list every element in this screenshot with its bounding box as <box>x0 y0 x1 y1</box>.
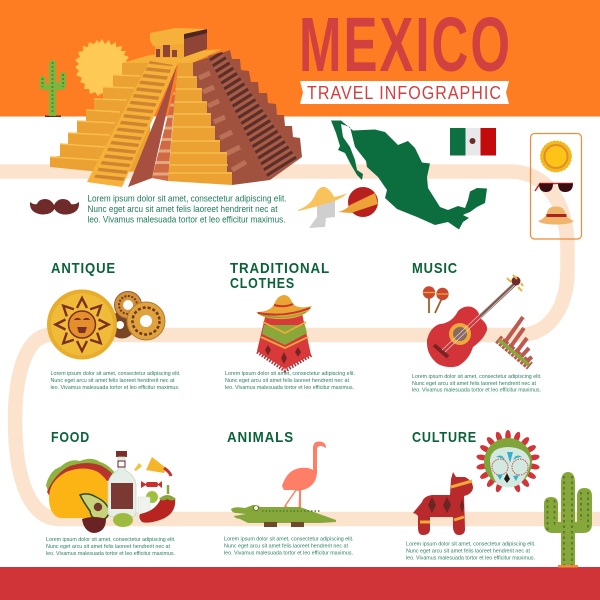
text: antique description: leo. Vivamus malesuada tortor et leo efficitur maximus. <box>50 385 180 391</box>
temple side lintel <box>184 29 207 39</box>
text: food description: leo. Vivamus malesuada tortor et leo efficitur maximus. <box>46 551 175 557</box>
temple doors <box>156 45 177 57</box>
icon: head with hat <box>298 187 348 228</box>
illustration: sugar skull <box>476 430 540 493</box>
pyramid centre step edges <box>162 77 232 173</box>
poncho fringe <box>257 352 312 371</box>
temple front wall <box>155 43 184 58</box>
text: animals description <box>224 536 354 556</box>
text: music description: Nunc eget arcu sit amet felis laoreet hendrerit nec at <box>412 381 536 387</box>
pyramid platform <box>122 49 222 63</box>
illustration: Mayan pyramid <box>50 28 302 187</box>
text: animals description: Lorem ipsum dolor sit amet, consectetur adipiscing elit. <box>224 536 354 542</box>
shot glass <box>138 491 158 522</box>
text: clothes description <box>225 371 355 391</box>
text: clothes description: Lorem ipsum dolor sit amet, consectetur adipiscing elit. <box>225 371 355 377</box>
text: music description <box>412 374 542 394</box>
heading: antique: ANTIQUE <box>51 260 116 277</box>
heading: traditional clothes: CLOTHES <box>230 275 295 292</box>
icon: small cactus <box>40 60 66 117</box>
temple roof <box>150 28 207 46</box>
lime <box>113 513 133 527</box>
text: food description: Lorem ipsum dolor sit amet, consectetur adipiscing elit. <box>46 537 176 543</box>
heading: animals: ANIMALS <box>227 429 294 446</box>
poncho body <box>257 313 311 369</box>
footer: red band <box>0 567 600 600</box>
map of Mexico <box>331 120 487 230</box>
illustration: poncho and sombrero <box>256 295 312 371</box>
text: food description: Nunc eget arcu sit amet felis laoreet hendrerit nec at <box>46 544 170 550</box>
poncho green band <box>262 325 307 345</box>
pyramid brick stripe <box>152 65 177 181</box>
text: antique description: Nunc eget arcu sit amet felis laoreet hendrerit nec at <box>50 378 175 384</box>
heading: food: FOOD <box>51 429 90 446</box>
chili <box>139 485 176 523</box>
text: animals description: leo. Vivamus malesuada tortor et leo efficitur maximus. <box>224 550 353 556</box>
pyramid centre steps <box>168 63 232 185</box>
poncho diamonds <box>265 345 301 364</box>
icon: striped ball <box>338 187 378 217</box>
beads <box>108 292 165 340</box>
main text block: leo. Vivamus malesuada tortor et leo efficitur maximus. <box>88 214 286 224</box>
text: culture description: Lorem ipsum dolor sit amet, consectetur adipiscing elit. <box>406 542 536 548</box>
small spice <box>134 463 142 471</box>
text: antique description: Lorem ipsum dolor sit amet, consectetur adipiscing elit. <box>50 371 180 377</box>
text: culture description: Nunc eget arcu sit amet felis laoreet hendrerit nec at <box>406 548 530 554</box>
icon: straw hat <box>538 206 574 224</box>
pyramid right face <box>192 50 302 185</box>
illustration: flamingo and crocodile <box>231 441 336 527</box>
pyramid centre wedge <box>128 65 177 187</box>
pyramid right ledges <box>199 73 246 170</box>
text: food description <box>46 537 176 557</box>
pyramid left stair treads <box>93 61 173 184</box>
icon: large cactus <box>544 472 592 568</box>
bean <box>82 517 106 533</box>
pyramid left steps <box>50 60 150 172</box>
main text block: Lorem ipsum dolor sit amet, consectetur adipiscing elit. <box>88 194 286 204</box>
heading: traditional clothes <box>230 260 330 292</box>
illustration: food group <box>46 451 176 533</box>
flamingo <box>282 441 326 516</box>
text: music description: Lorem ipsum dolor sit amet, consectetur adipiscing elit. <box>412 374 542 380</box>
main text block <box>88 194 286 224</box>
icon: moustache <box>30 199 79 215</box>
heading: music: MUSIC <box>412 260 458 277</box>
icon: sunglasses <box>535 184 573 192</box>
sun stone <box>47 290 117 360</box>
nacho <box>146 457 171 476</box>
text: clothes description: leo. Vivamus malesuada tortor et leo efficitur maximus. <box>225 385 354 391</box>
heading: traditional clothes: TRADITIONAL <box>230 260 330 277</box>
text: antique description <box>50 371 180 391</box>
crocodile <box>231 505 336 527</box>
text: culture description: leo. Vivamus malesuada tortor et leo efficitur maximus. <box>406 556 535 562</box>
text: clothes description: Nunc eget arcu sit amet felis laoreet hendrerit nec at <box>225 378 349 384</box>
temple side wall <box>184 29 207 57</box>
heading: culture: CULTURE <box>412 429 477 446</box>
icon: guitar <box>427 275 523 367</box>
taco <box>46 459 116 518</box>
icon: maracas <box>423 286 449 313</box>
text: animals description: Nunc eget arcu sit amet felis laoreet hendrerit nec at <box>224 544 348 550</box>
illustration: antique coins <box>47 290 165 360</box>
icon: kit sun <box>540 141 572 172</box>
avocado <box>80 494 109 520</box>
route: winding travel path <box>0 172 600 519</box>
header: orange band <box>0 0 600 116</box>
tequila bottle <box>108 451 136 517</box>
skull petals <box>476 430 540 493</box>
pyramid step edges <box>50 75 140 160</box>
icon: pan pipes <box>498 317 532 366</box>
icon: sun <box>75 39 130 97</box>
main text block: Nunc eget arcu sit amet felis laoreet hendrerit nec at <box>88 204 278 214</box>
sombrero <box>256 295 312 319</box>
pyramid left stair <box>87 60 178 187</box>
panel: travel kit <box>530 134 582 239</box>
pyramid right stair <box>208 52 298 178</box>
text: culture description <box>406 542 536 562</box>
candy <box>141 481 162 488</box>
subtitle ribbon: TRAVEL INFOGRAPHIC <box>307 82 502 103</box>
illustration: pinata <box>413 472 473 535</box>
text: music description: leo. Vivamus malesuada tortor et leo efficitur maximus. <box>412 388 541 394</box>
icon: Mexican flag <box>450 128 496 156</box>
poncho orange band <box>261 322 308 348</box>
